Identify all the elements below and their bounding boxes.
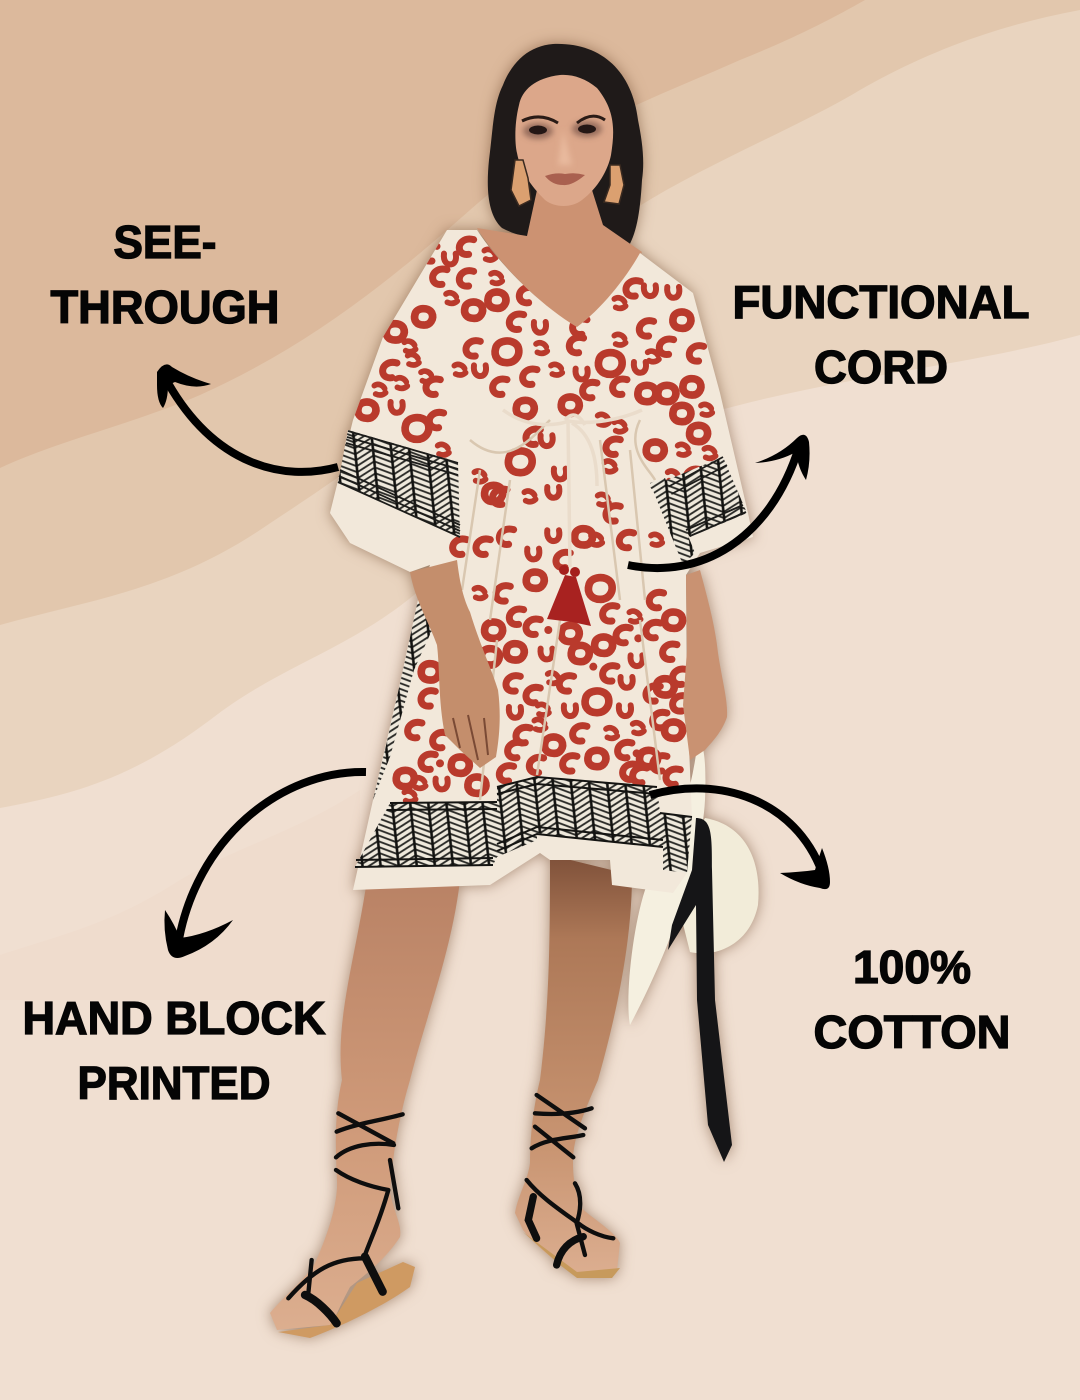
label: 100% cotton: 100%: [853, 941, 971, 993]
label: see-through: [50, 216, 280, 333]
background: wave upper right: [0, 0, 1080, 625]
leg: left: [270, 880, 460, 1330]
arrow: to see-through: [157, 364, 338, 472]
leg: right: [515, 855, 632, 1275]
sandal straps: [288, 1095, 613, 1323]
hat crown: [672, 818, 759, 953]
label: hand block printed: HAND BLOCK: [22, 992, 326, 1044]
label: hand block printed: PRINTED: [78, 1057, 270, 1109]
label: see-through: SEE-: [114, 216, 216, 268]
side border: [373, 600, 432, 800]
label: functional cord: CORD: [814, 341, 948, 393]
kaftan dress body: [330, 230, 753, 893]
background: pale wave: [0, 0, 1080, 808]
arrow: to 100% cotton: [650, 788, 830, 889]
neck and chest: [477, 190, 642, 328]
arrow: to hand block printed: [164, 772, 366, 958]
hair: [488, 44, 643, 249]
lips: [545, 173, 585, 185]
eyes and brows: [522, 116, 605, 134]
hat: [628, 738, 759, 1162]
background: low left wave: [0, 790, 360, 1000]
label: 100% cotton: [814, 941, 1010, 1058]
hat brim: [628, 738, 705, 1025]
label: see-through: THROUGH: [50, 281, 280, 333]
arm: left with hand: [410, 560, 500, 768]
background: dark wave: [0, 0, 865, 468]
ribbon: [668, 818, 732, 1162]
cord: [503, 410, 642, 567]
sleeve border right: [650, 457, 747, 565]
label: functional cord: [732, 276, 1030, 393]
face soft shading: [523, 121, 602, 165]
upper print: [358, 239, 716, 568]
lower print: [396, 572, 687, 802]
label: functional cord: FUNCTIONAL: [732, 276, 1030, 328]
hem border: [355, 777, 692, 873]
earrings: [511, 160, 624, 206]
sandal soles: [278, 1232, 620, 1338]
arrow: to functional cord: [628, 435, 810, 568]
finger lines: [453, 715, 488, 760]
tassel: [547, 565, 591, 626]
sleeve border left: [338, 430, 460, 537]
face: [515, 75, 613, 206]
dress leopard print: [358, 239, 716, 802]
figure: model wearing kaftan: [270, 44, 759, 1338]
label: hand block printed: [22, 992, 326, 1109]
arm: right with hand: [683, 570, 727, 760]
label: 100% cotton: COTTON: [814, 1006, 1010, 1058]
waist gathers: [462, 420, 660, 800]
